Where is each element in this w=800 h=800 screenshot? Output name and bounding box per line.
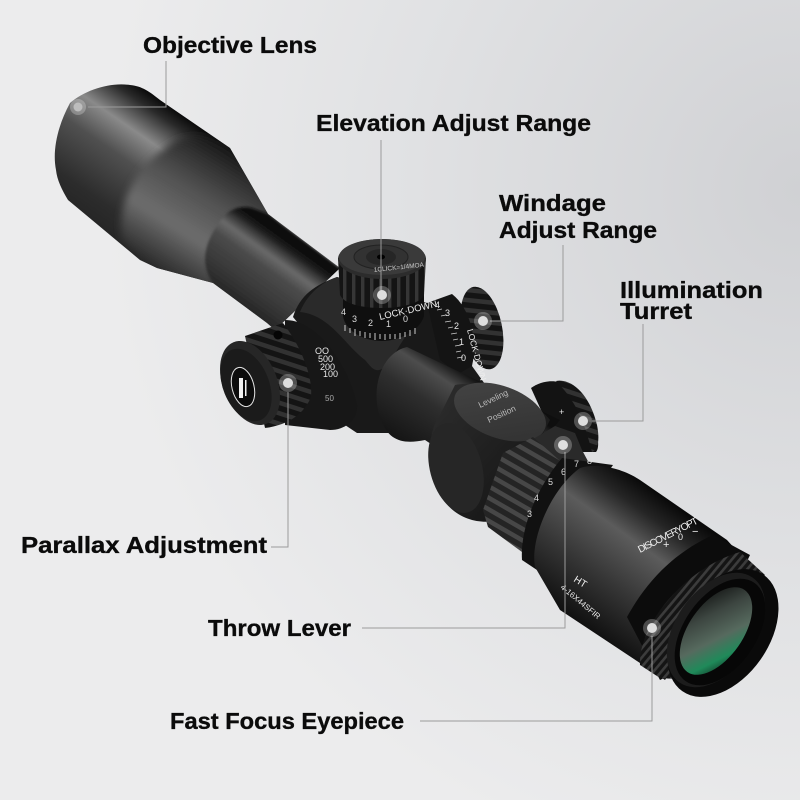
label: parallax adjustment: Parallax Adjustment (21, 532, 267, 558)
label: windage adjust range (499, 190, 657, 243)
leveling block (419, 371, 554, 522)
elevation scale: LOCK·DOWN (378, 299, 438, 323)
elevation scale: 2 (368, 318, 373, 328)
throw lever (530, 426, 590, 470)
model text: HT (571, 574, 589, 591)
saddle body (293, 277, 487, 433)
label: illumination turret (620, 277, 763, 324)
elevation scale: 3 (352, 314, 357, 324)
illumination turret (531, 381, 598, 452)
ocular body (534, 466, 745, 680)
illumination turret: + (559, 407, 564, 417)
power numbers: 8 (587, 456, 592, 466)
fast focus eyepiece (627, 535, 800, 718)
center tube (377, 347, 560, 490)
parallax logo (227, 365, 259, 409)
windage scale: LOCK·DOWN (465, 328, 488, 382)
lens (665, 575, 767, 687)
power ring (483, 437, 613, 572)
label: windage adjust range: Adjust Range (499, 217, 657, 243)
objective bell (54, 84, 339, 327)
main tube (205, 207, 345, 335)
parallax scale: OO (315, 346, 329, 356)
parallax scale: 500 (318, 354, 333, 364)
power numbers (527, 456, 592, 519)
brand text: + (663, 539, 669, 551)
power numbers: 6 (561, 467, 566, 477)
windage scale: 0 (461, 353, 466, 363)
elevation cap text: 1CLICK=1/4MOA (373, 262, 425, 274)
power numbers: 3 (527, 509, 532, 519)
parallax scale: 50 (325, 394, 334, 403)
elevation turret (338, 239, 438, 341)
windage scale: 2 (454, 321, 459, 331)
brand text: DISCOVERYOPT (636, 516, 700, 556)
windage scale: 1 (459, 337, 464, 347)
power numbers: 7 (574, 459, 579, 469)
model text: 4-16X44SFIR (559, 583, 602, 621)
label: illumination turret: Illumination (620, 277, 763, 303)
parallax adjustment knob (208, 320, 357, 434)
riflescope (40, 70, 800, 718)
marker dots (70, 99, 661, 637)
windage turret (427, 283, 510, 382)
label: objective lens: Objective Lens (143, 32, 317, 58)
label: windage adjust range: Windage (499, 190, 606, 216)
brand text: − (692, 526, 698, 538)
windage scale: 4 (435, 300, 440, 310)
elevation scale: 0 (403, 314, 408, 324)
leader lines (88, 61, 652, 721)
label: fast focus eyepiece: Fast Focus Eyepiece (170, 708, 404, 734)
leveling label: Position (486, 403, 517, 425)
parallax scale: 100 (323, 369, 338, 379)
brand text: 0 (678, 532, 683, 542)
leveling label (477, 387, 517, 425)
label: illumination turret: Turret (620, 298, 692, 324)
windage scale: 3 (445, 308, 450, 318)
elevation scale: 4 (341, 307, 346, 317)
parallax scale: 200 (320, 362, 335, 372)
power numbers: 5 (548, 477, 553, 487)
label: throw lever: Throw Lever (208, 615, 351, 641)
power numbers: 4 (534, 493, 539, 503)
windage scale (435, 300, 488, 382)
leveling label: Leveling (477, 387, 510, 410)
elevation scale: 1 (386, 319, 391, 329)
label: elevation adjust range: Elevation Adjust Range (316, 110, 591, 136)
elevation scale (341, 299, 438, 340)
parallax scale (315, 346, 338, 403)
